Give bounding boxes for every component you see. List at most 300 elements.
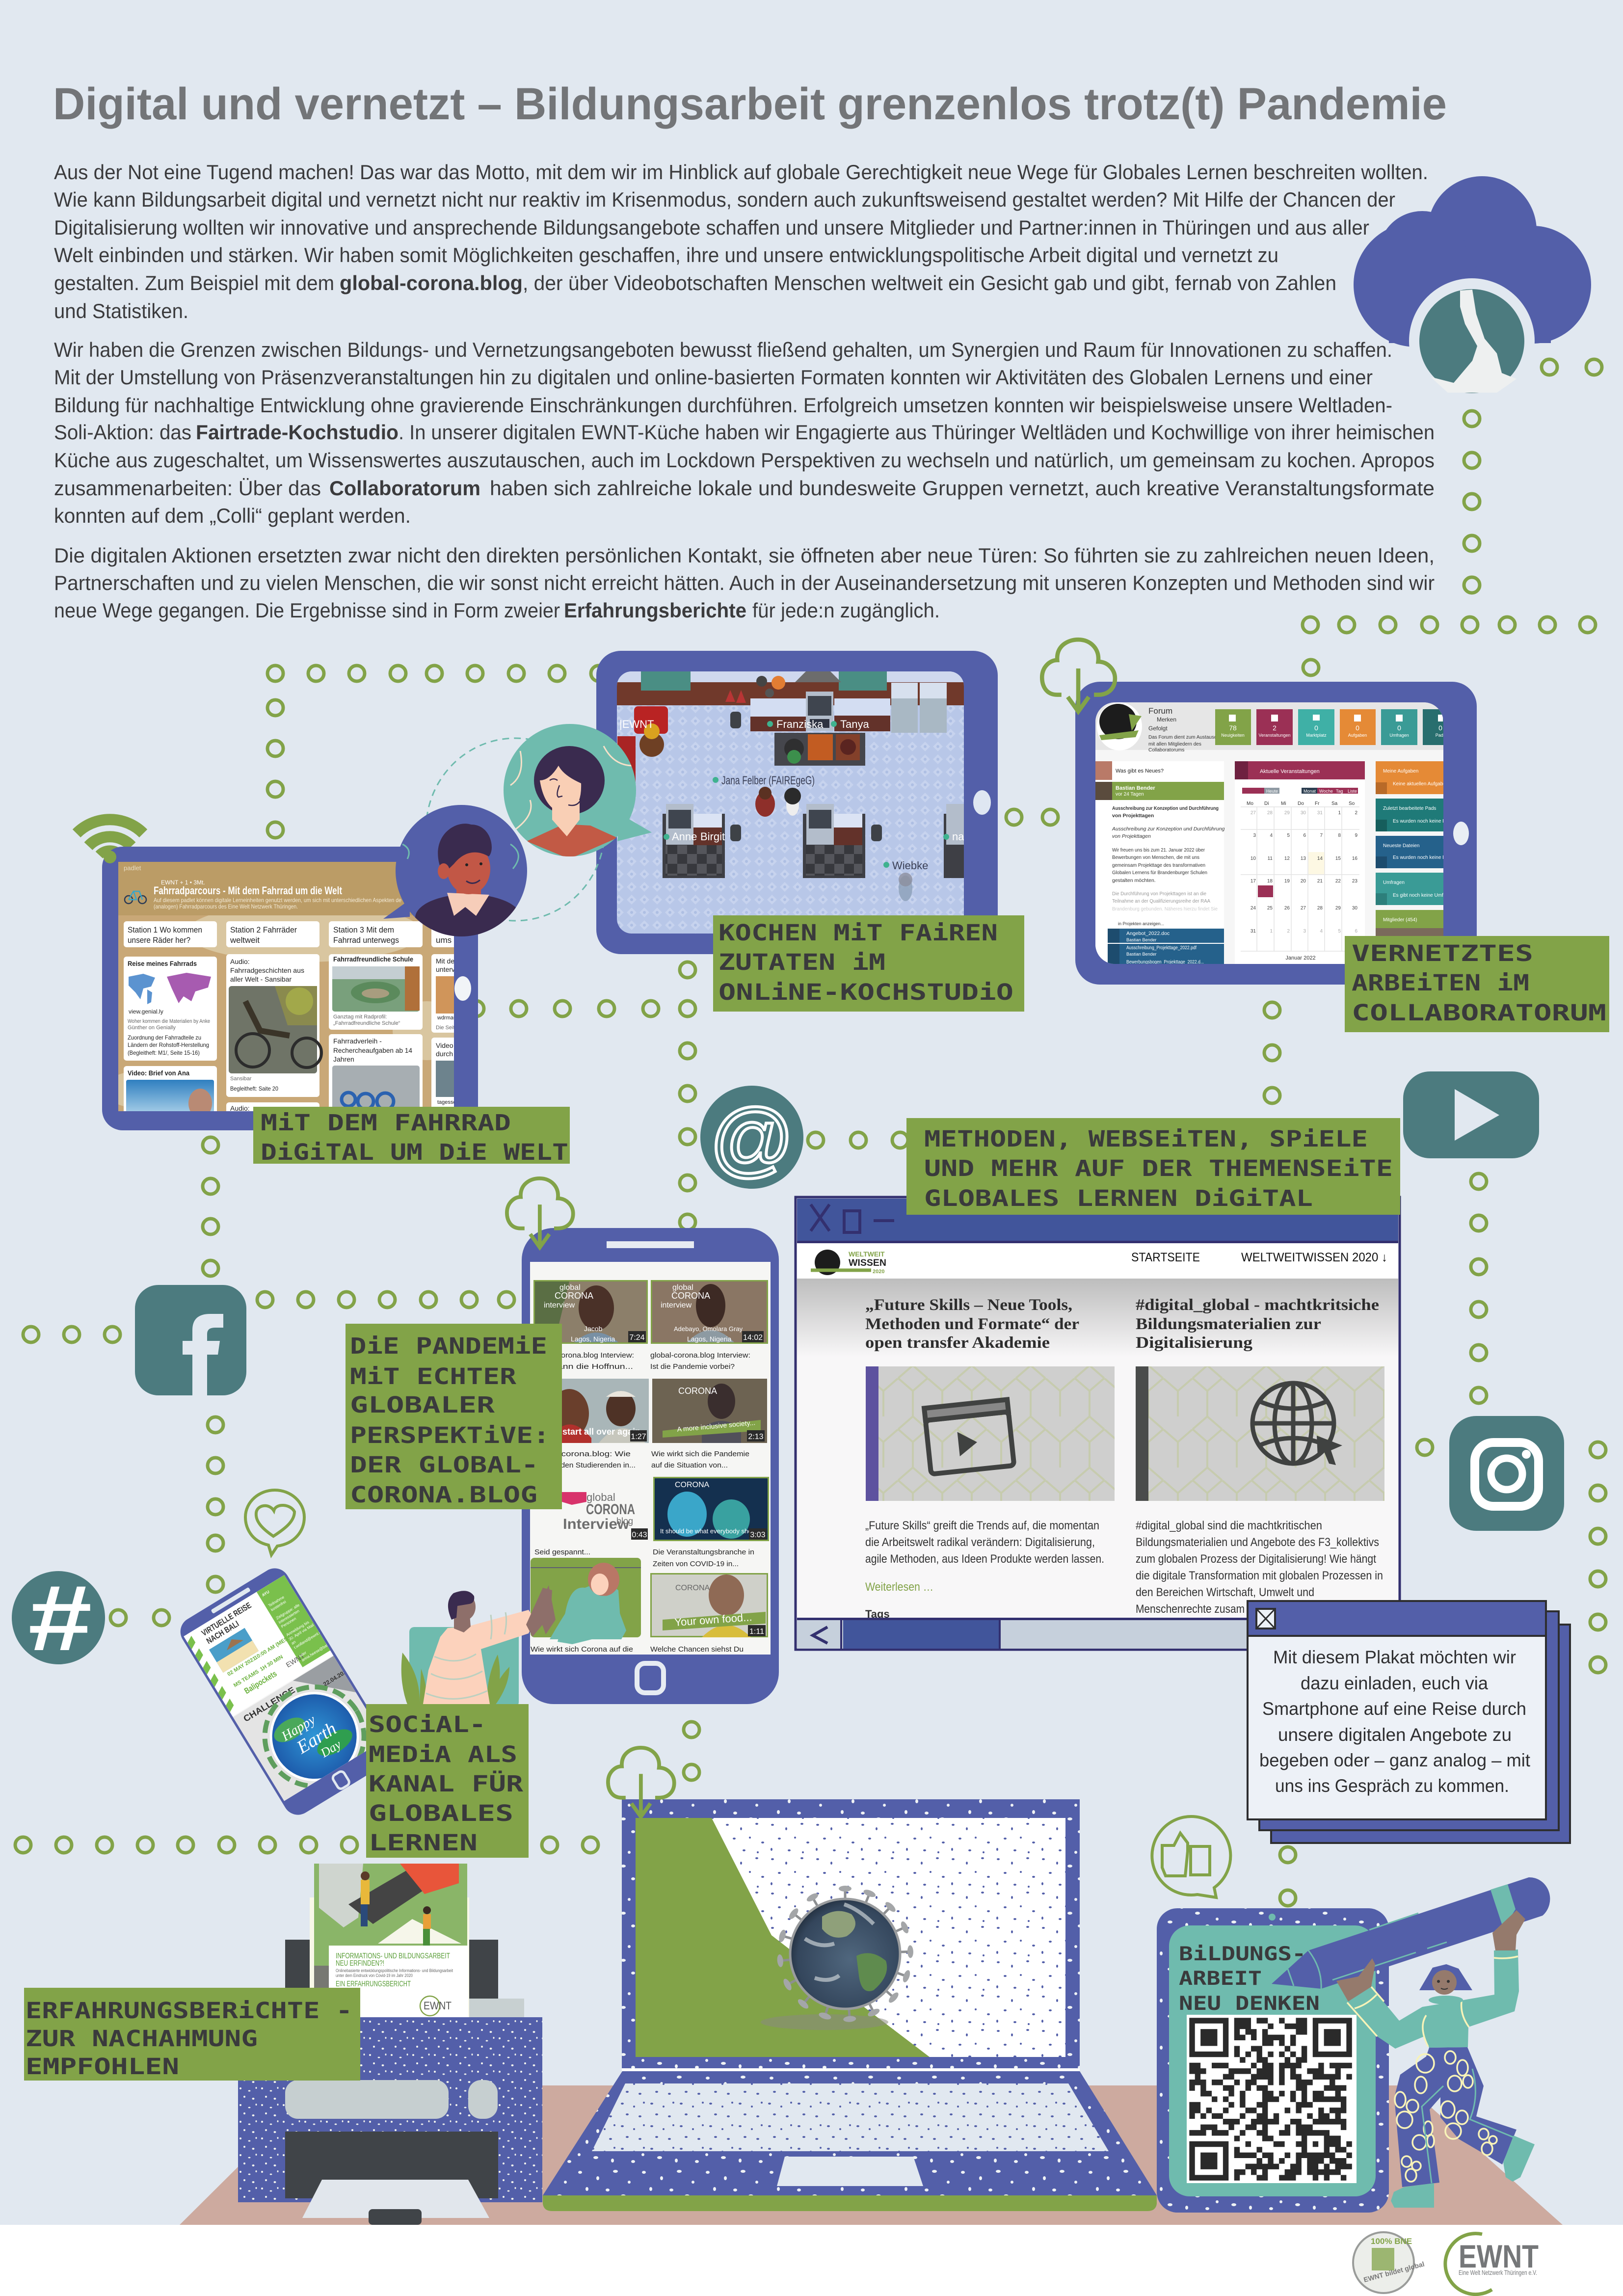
- label: Pandemie: CORONA.BLOG: [350, 1482, 537, 1508]
- intro text: paragraph 1: , der über Videobotschaften Menschen weltweit ein Gesicht gab und gibt, fernab von Zahlen: [523, 271, 1336, 294]
- dashed link between avatars: [426, 738, 605, 921]
- collaboratorum screen: 0: [1438, 724, 1442, 732]
- calendar: 1: [1270, 929, 1273, 934]
- video thumbnail row 3: CORONA: [586, 1501, 635, 1518]
- social phone screen: t.wolland@ewnt.org: [293, 1628, 325, 1650]
- right side panels: [1376, 761, 1454, 938]
- collaboratorum screen: von Projekttagen: [1112, 813, 1154, 819]
- social phone screen: an: [291, 1640, 296, 1646]
- collaboratorum screen: 0: [1397, 724, 1401, 732]
- icon: cloud with globe: [1354, 176, 1591, 404]
- label: Bildungsarbeit neu denken: BiLDUNGS-: [1179, 1943, 1306, 1965]
- intro text: paragraph 2: Fairtrade-Kochstudio: [196, 421, 399, 444]
- kitchen home button: [973, 790, 991, 815]
- collaboratorum screen: Aufgaben: [1348, 733, 1367, 738]
- window title bar: [797, 1199, 1398, 1243]
- social phone screen: 22.04.2021: [322, 1666, 351, 1688]
- calendar: 25: [1267, 906, 1273, 911]
- label: Fahrrad: [253, 1107, 570, 1165]
- right side panels: Meine Aufgaben: [1383, 769, 1418, 774]
- intro text: paragraph 1: Wie kann Bildungsarbeit digital und vernetzt nicht nur reaktiv im Krisenmodus, sondern auch zukunftsweisend gestaltet werden? Mit Hilfe der Chancen der: [54, 188, 1395, 211]
- video thumbnail row 1: interview: [544, 1301, 575, 1309]
- calendar: 29: [1335, 906, 1341, 911]
- right side panels: Zuletzt bearbeitete Pads: [1383, 806, 1436, 811]
- label: Collaboratorum: VERNETZTES: [1352, 940, 1533, 966]
- laptop screen: [622, 1799, 1080, 2069]
- popup front window: begeben oder – ganz analog – mit: [1259, 1750, 1531, 1770]
- kitchen screen: |EWNT: [619, 718, 654, 730]
- video thumbnail row 3: Interview: [563, 1516, 630, 1532]
- video durations: [628, 1331, 767, 1636]
- calendar: Heute: [1266, 789, 1278, 794]
- calendar: 4: [1320, 929, 1323, 934]
- label: Collaboratorum: COLLABORATORUM: [1352, 1000, 1606, 1026]
- label: Kochstudio: KOCHEN MiT FAiREN: [718, 920, 998, 946]
- calendar: Sa: [1331, 801, 1338, 806]
- padlet screen: Ganztag mit Radprofil:: [333, 1014, 387, 1020]
- article 2: den Bereichen Wirtschaft, Umwelt und: [1136, 1586, 1314, 1599]
- video captions: Die Veranstaltungsbranche in: [653, 1548, 754, 1556]
- shoes: [1503, 2136, 1535, 2182]
- social phone screen: 02 MAY 2021: [226, 1655, 257, 1678]
- social phone screen: 30. April via Mail: [288, 1623, 315, 1641]
- label: Social Media: GLOBALES: [369, 1800, 513, 1826]
- video grid: [531, 1280, 769, 1654]
- giant pencil: [1272, 1877, 1550, 1989]
- social phone screen: Earth: [293, 1718, 340, 1758]
- intro text: paragraph 3: neue Wege gegangen. Die Ergebnisse sind in Form zweier: [54, 599, 560, 622]
- report cover: [310, 1864, 469, 2017]
- calendar: 27: [1251, 810, 1256, 816]
- article 2: zum globalen Prozess der Digitalisierung! Wie hängt: [1136, 1552, 1376, 1566]
- padlet screen: Zuordnung der Fahrradteile zu: [128, 1034, 201, 1041]
- popup front window: dazu einladen, euch via: [1301, 1673, 1488, 1693]
- article 2: #digital_global - machtkritsiche: [1136, 1296, 1379, 1314]
- report cover: INFORMATIONS- UND BILDUNGSARBEIT: [336, 1952, 450, 1960]
- calendar: Monat: [1304, 789, 1316, 794]
- title: Digital und vernetzt – Bildungsarbeit grenzenlos trotz(t) Pandemie: [53, 79, 1447, 129]
- calendar: 11: [1268, 856, 1273, 861]
- tablet: padlet Fahrrad: [102, 847, 478, 1130]
- padlet screen: view.genial.ly: [129, 1008, 163, 1015]
- label: Social Media: LERNEN: [369, 1830, 478, 1856]
- calendar: 4: [1270, 833, 1273, 838]
- article 1: open transfer Akademie: [865, 1334, 1050, 1352]
- intro text: paragraph 3: Partnerschaften und zu vielen Menschen, die wir sonst nicht erreicht hätten. Auch in der Auseinandersetzung mit unseren Konzepten und Methoden sind wir: [54, 571, 1435, 594]
- collaboratorum screen: mit allen Mitgliedern des: [1148, 742, 1201, 747]
- kitchen avatars: [755, 787, 912, 901]
- collaboratorum screen: 0: [1314, 724, 1318, 732]
- right side panels: Neueste Dateien: [1383, 843, 1419, 849]
- label: Erfahrungsberichte: ERFAHRUNGSBERiCHTE -: [26, 1998, 352, 2024]
- intro text: paragraph 2: . In unserer digitalen EWNT-Küche haben wir Engagierte aus Thüringer Weltläden und Kochwillige von ihrer heimischen: [399, 421, 1435, 444]
- calendar: 6: [1303, 833, 1306, 838]
- video grid: 3:03: [750, 1531, 766, 1539]
- video captions: Wie wirkt sich die Pandemie: [651, 1450, 749, 1458]
- social phone screen: 1H 30 MIN: [259, 1654, 284, 1673]
- Weltweit Wissen logo: WELTWEIT: [849, 1250, 885, 1258]
- label: Erfahrungsberichte: ZUR NACHAHMUNG: [26, 2026, 258, 2052]
- padlet screen: Station 2 Fahrräder: [230, 925, 297, 934]
- video thumbnail row 4: CORONA: [675, 1584, 710, 1592]
- social phone screen: 10:00 AM (MEST): [253, 1633, 293, 1661]
- browser window: Globales Lernen digital: [796, 1197, 1400, 1650]
- calendar: 28: [1317, 906, 1323, 911]
- label: Pandemie: [346, 1324, 562, 1509]
- Weltweit Wissen logo: 2020: [873, 1269, 884, 1275]
- padlet screen: Video: [436, 1041, 453, 1049]
- label: Bildungsarbeit neu denken: [1179, 1943, 1320, 2015]
- video thumbnail row 1: CORONA: [671, 1291, 710, 1301]
- intro text: paragraph 2: haben sich zahlreiche lokale und bundesweite Gruppen vernetzt, auch kreative Veranstaltungsformate: [490, 477, 1435, 500]
- icon: play button: [1403, 1071, 1539, 1158]
- video captions: Welche Chancen siehst Du: [650, 1645, 744, 1654]
- kitchen screen: na: [952, 830, 964, 843]
- calendar: So: [1349, 801, 1355, 806]
- calendar: 6: [1355, 929, 1357, 934]
- label: Social Media: SOCiAL-: [369, 1711, 486, 1737]
- line icon: download cloud 1: [1042, 640, 1115, 712]
- label: Kochstudio: ONLiNE-KOCHSTUDiO: [718, 979, 1013, 1005]
- label: Bildungsarbeit neu denken: ARBEIT: [1179, 1968, 1262, 1990]
- article 2: die digitale Transformation mit globalen Prozessen in: [1136, 1569, 1383, 1582]
- video captions: geht es den Studierenden in...: [533, 1461, 636, 1469]
- padlet screen: [103, 862, 461, 1118]
- kitchen cooking stations: [663, 804, 964, 878]
- intro text: paragraph 3: Erfahrungsberichte: [564, 599, 746, 622]
- social phone screen: Personen: [280, 1616, 297, 1629]
- padlet screen: Video: Brief von Ana: [128, 1069, 189, 1077]
- social phone screen: Anmeldung bis: [286, 1620, 310, 1637]
- collaboratorum screen: gestalten möchten.: [1112, 878, 1156, 883]
- kitchen screen: Anne: [672, 830, 697, 843]
- padlet screen: Audio:: [230, 958, 250, 965]
- intro text: paragraph 2: Wir haben die Grenzen zwischen Bildungs- und Vernetzungsangeboten bewusst fließend gehalten, um Synergien und Raum für Innovationen zu schaffen.: [54, 338, 1392, 361]
- calendar: 30: [1352, 906, 1357, 911]
- padlet screen: Fahrradverleih -: [333, 1037, 382, 1045]
- label: Collaboratorum: [1345, 936, 1609, 1032]
- collaboratorum screen: Merken: [1157, 716, 1176, 723]
- kitchen screen: [617, 671, 964, 934]
- video thumbnail row 3: It should be what everybody should: [660, 1527, 760, 1535]
- calendar: 24: [1251, 906, 1256, 911]
- padlet screen: Mit de: [436, 957, 454, 965]
- label: Pandemie: GLOBALER: [350, 1392, 495, 1418]
- report cover: EIN ERFAHRUNGSBERICHT: [336, 1980, 411, 1988]
- calendar: 22: [1335, 879, 1341, 884]
- padlet screen: weltweit: [230, 935, 260, 945]
- padlet screen: durch: [436, 1050, 453, 1058]
- label: Kochstudio: [713, 915, 1024, 1012]
- tilted phone: social media: [175, 1561, 401, 1820]
- padlet screen: Station 3 Mit dem: [333, 925, 394, 934]
- calendar: Mo: [1247, 801, 1253, 806]
- footer logo: EWNT bildet global seal: 100% BNE: [1371, 2237, 1412, 2246]
- padlet screen: (Begleitheft: M1/, Seite 15-16): [128, 1049, 200, 1056]
- QR phone: [1157, 1908, 1389, 2213]
- video thumbnail row 4: Your own food...: [674, 1611, 752, 1629]
- padlet screen: Begleitheft: Saite 20: [230, 1085, 278, 1092]
- label: Pandemie: PERSPEKTiVE:: [350, 1422, 550, 1448]
- collaboratorum screen: Bastian Bender: [1126, 952, 1157, 957]
- intro text: paragraph 3: [54, 544, 1435, 622]
- icon: globe with cursor: [1252, 1383, 1342, 1465]
- kitchen screen: Franziska: [776, 718, 824, 730]
- calendar: 16: [1352, 856, 1357, 861]
- article 1: agile Methoden, aus Ideen Produkte werden lassen.: [865, 1552, 1104, 1566]
- social phone screen: interessierten: [278, 1609, 300, 1625]
- icon: bicycle: [125, 891, 146, 904]
- collaboratorum screen: [1095, 702, 1454, 965]
- video thumbnail row 1: Lagos, Nigeria: [687, 1335, 731, 1343]
- intro text: paragraph 1: Welt einbinden und stärken. Wir haben somit Möglichkeiten geschaffen, ihre und unsere entwicklungspolitische Arbeit digital und vernetzt zu: [54, 243, 1278, 267]
- video thumbnail row 3: CORONA: [675, 1481, 710, 1489]
- collaboratorum screen: Umfragen: [1389, 733, 1409, 738]
- head: [1419, 1964, 1472, 2004]
- label: Pandemie: DER GLOBAL-: [350, 1452, 538, 1478]
- icon: heart bubble: [245, 1490, 304, 1555]
- video grid: 14:02: [743, 1334, 763, 1342]
- padlet screen: aller Welt - Sansibar: [230, 975, 292, 983]
- social phone screen: VIRTUELLE REISE: [200, 1601, 253, 1638]
- collaboratorum screen: gemeinsam Projekttage des transformativen: [1112, 862, 1205, 868]
- calendar: 7: [1320, 833, 1323, 838]
- padlet screen: Fahrradgeschichten aus: [230, 966, 304, 974]
- desk: [180, 2085, 1563, 2225]
- padlet screen: ganztagsschulen.org: [335, 1005, 385, 1011]
- video thumbnail row 1: global: [672, 1283, 693, 1292]
- footer logo: EWNT: Eine Welt Netzwerk Thüringen e.V.: [1459, 2269, 1537, 2276]
- calendar: 5: [1338, 929, 1341, 934]
- intro text: paragraph 2: Soli-Aktion: das: [54, 421, 191, 444]
- hands: [1492, 1910, 1525, 1950]
- illustration: woman high five: [537, 1563, 626, 1644]
- avatar: woman in speech bubble: [504, 724, 652, 859]
- right side panels: Es gibt noch keine Umfrage: [1393, 893, 1453, 898]
- label: Methoden: GLOBALES LERNEN DiGiTAL: [924, 1185, 1313, 1211]
- collaboratorum screen: Das Forum dient zum Austausch: [1148, 735, 1220, 740]
- social phone screen: Zielgruppe: alle: [275, 1602, 301, 1621]
- video thumbnail row 1: Jacob: [584, 1325, 603, 1333]
- video captions: Seid gespannt...: [534, 1548, 590, 1556]
- right side panels: Keine aktuellen Aufgaben: [1393, 781, 1448, 787]
- padlet screen: Fahrradparcours - Mit dem Fahrrad um die Welt: [154, 884, 343, 897]
- social phone screen: Day: [318, 1737, 344, 1761]
- article 2: Digitalisierung: [1136, 1334, 1253, 1352]
- padlet screen: tagessc: [437, 1099, 456, 1105]
- video thumbnail row 2: start all over again: [562, 1427, 640, 1437]
- article 1: Weiterlesen …: [865, 1580, 933, 1594]
- label: Kochstudio: ZUTATEN iM: [718, 949, 885, 975]
- collaboratorum screen: Gefolgt: [1148, 725, 1168, 732]
- label: Fahrrad: MiT DEM FAHRRAD: [261, 1110, 511, 1136]
- label: Collaboratorum: ARBEiTEN iM: [1352, 970, 1529, 996]
- video grid: 7:24: [629, 1334, 645, 1342]
- line icon: download cloud 3: [608, 1748, 674, 1817]
- label: Bildungsarbeit neu denken: NEU DENKEN: [1179, 1993, 1320, 2015]
- footer logo: EWNT: [1445, 2234, 1539, 2295]
- padlet screen: Fahrrad unterwegs: [333, 935, 399, 945]
- calendar: 1: [1338, 810, 1341, 816]
- QR code: [1187, 2015, 1357, 2183]
- social phone screen: [184, 1572, 395, 1810]
- video thumbnail row 2: A more inclusive society...: [677, 1418, 756, 1433]
- video grid: 1:27: [631, 1433, 646, 1441]
- intro text: paragraph 3: für jede:n zugänglich.: [752, 599, 940, 622]
- smartphone: global-corona blog: [522, 1228, 779, 1704]
- illustration: woman holding pencil: [1272, 1877, 1550, 2208]
- collaboratorum screen: Marktplatz: [1306, 733, 1327, 738]
- calendar: 9: [1355, 833, 1357, 838]
- line icon: download cloud 2: [507, 1178, 573, 1248]
- video thumbnail row 3: blog: [616, 1516, 633, 1526]
- calendar: Aktuelle Veranstaltungen: [1260, 769, 1320, 774]
- social phone screen: MS TEAMS: [233, 1669, 260, 1688]
- video thumbnail row 1: [533, 1280, 768, 1344]
- video captions: auf die Situation von...: [651, 1461, 728, 1469]
- article 2: Menschenrechte zusam: [1136, 1602, 1245, 1616]
- kitchen screen: Birgit: [700, 830, 725, 843]
- padlet screen: Woher kommen die Materialien by Anke: [128, 1018, 210, 1024]
- article 2: #digital_global sind die machtkritischen: [1136, 1519, 1322, 1532]
- intro text: paragraph 2: zusammenarbeiten: Über das: [54, 477, 321, 500]
- intro text: paragraph 3: Die digitalen Aktionen ersetzten zwar nicht den direkten persönlichen Kontakt, sie öffneten aber neue Türen: So führten sie zu zahlreichen neuen Ideen,: [54, 544, 1435, 567]
- social phone screen: AYU: [261, 1590, 270, 1598]
- social phone screen: NACH BALI: [205, 1619, 240, 1646]
- padlet screen: Sansibar: [230, 1076, 252, 1082]
- video captions: global-corona.blog Interview:: [533, 1351, 634, 1360]
- label: Methoden: UND MEHR AUF DER THEMENSEiTE: [924, 1155, 1393, 1181]
- calendar: 17: [1251, 879, 1256, 884]
- calendar: 10: [1251, 856, 1256, 861]
- kitchen screen: Tanya: [840, 718, 869, 730]
- calendar: 23: [1352, 879, 1357, 884]
- intro text: paragraph 1: gestalten. Zum Beispiel mit dem: [54, 271, 334, 294]
- label: Pandemie: MiT ECHTER: [350, 1363, 517, 1389]
- video captions: Wie wirkt sich Corona auf die: [531, 1645, 633, 1654]
- video thumbnail row 1: global: [559, 1283, 581, 1292]
- icon: hashtag: [12, 1566, 105, 1670]
- calendar: 3: [1303, 929, 1306, 934]
- label: Methoden: METHODEN, WEBSEiTEN, SPiELE: [924, 1126, 1368, 1152]
- popup window stack: [1248, 1601, 1570, 1843]
- collaboratorum home button: [1453, 822, 1469, 845]
- icon: instagram: [1449, 1416, 1564, 1531]
- Weltweit Wissen logo: WISSEN: [849, 1258, 886, 1268]
- video thumbnail row 1: Adebayo, Omolara Gray: [674, 1325, 743, 1333]
- label: Social Media: MEDiA ALS: [369, 1741, 517, 1767]
- label: Pandemie: DiE PANDEMiE: [350, 1333, 547, 1359]
- calendar: Tag: [1336, 789, 1343, 794]
- phone home button: [637, 1663, 664, 1693]
- calendar: 14: [1317, 856, 1323, 861]
- video captions: Wie kann die Hoffnun...: [533, 1362, 633, 1371]
- tablet: kitchen game: [596, 651, 998, 954]
- collaboratorum screen: Forum: [1148, 706, 1172, 716]
- social phone screen: Happy: [278, 1712, 319, 1744]
- label: Methoden: [906, 1118, 1400, 1215]
- article 1: [865, 1296, 1115, 1620]
- padlet screen: Die Seite: [436, 1025, 458, 1031]
- video grid: 0:43: [632, 1531, 647, 1539]
- laptop: [543, 1799, 1157, 2211]
- wifi dot: [104, 851, 116, 863]
- article 2: Bildungsmaterialien zur: [1136, 1315, 1321, 1333]
- calendar: 31: [1317, 810, 1323, 816]
- label: Social Media: [366, 1704, 529, 1858]
- collaboratorum screen: Ausschreibung zur Konzeption und Durchführung: [1112, 805, 1219, 811]
- label: Erfahrungsberichte: [24, 1988, 360, 2081]
- intro text: paragraph 1: und Statistiken.: [54, 299, 188, 322]
- collaboratorum screen: Was gibt es Neues?: [1116, 768, 1164, 774]
- popup front window: unsere digitalen Angebote zu: [1278, 1725, 1512, 1745]
- collaboratorum screen: Bastian Bender: [1116, 785, 1155, 791]
- article 2: Bildungsmaterialien und Angebote des F3_kollektivs: [1136, 1536, 1379, 1549]
- kitchen screen: Jana Felber (FAIREgeG): [721, 774, 815, 787]
- avatar: man in speech bubble: [383, 805, 527, 941]
- report cover: EWNT: [424, 2000, 452, 2012]
- calendar: 19: [1284, 879, 1290, 884]
- social phone screen: oder: [298, 1650, 307, 1658]
- padlet screen: Jahren: [333, 1055, 354, 1063]
- collaboratorum screen: Pads: [1436, 733, 1446, 738]
- collaboratorum screen: von Projekttagen: [1112, 833, 1151, 839]
- calendar: 30: [1301, 810, 1306, 816]
- intro text: paragraph 1: Aus der Not eine Tugend machen! Das war das Motto, mit dem wir im Hinblick auf globale Gerechtigkeit neue Wege für Globales Lernen beschreiten wollten.: [54, 160, 1428, 184]
- padlet screen: Station 1 Wo kommen: [128, 925, 202, 934]
- calendar: 13: [1301, 856, 1306, 861]
- calendar: 18: [1267, 879, 1273, 884]
- report cover: NEU ERFINDEN?!: [336, 1959, 384, 1968]
- popup front window: uns ins Gespräch zu kommen.: [1275, 1776, 1509, 1796]
- right side panels: Umfragen: [1383, 880, 1405, 885]
- illustration: man high five: [401, 1588, 552, 1707]
- padlet screen: Günther on Genially: [128, 1025, 176, 1031]
- calendar: 28: [1267, 810, 1273, 816]
- Weltweit Wissen logo: [811, 1250, 886, 1275]
- label: Erfahrungsberichte: EMPFOHLEN: [26, 2054, 179, 2080]
- padlet home button: [454, 976, 471, 1001]
- intro text: paragraph 2: konnten auf dem „Colli“ geplant werden.: [54, 504, 411, 527]
- browser window: Globales Lernen digital: WELTWEITWISSEN 2020 ↓: [1241, 1251, 1387, 1264]
- calendar: Woche: [1319, 789, 1333, 794]
- video thumbnail row 1: Lagos, Nigeria: [571, 1335, 615, 1343]
- social phone screen: EWNT: [285, 1652, 306, 1669]
- video thumbnail row 3: global: [586, 1491, 615, 1503]
- intro text: paragraph 2: Küche aus zugeschaltet, um Wissenswertes auszutauschen, auch im Lockdown Perspektiven zu wechseln und natürlich, um gemeinsam zu kochen. Apropos: [54, 449, 1435, 472]
- calendar: 29: [1284, 810, 1290, 816]
- footer logo: EWNT bildet global seal: [1353, 2232, 1425, 2293]
- intro text: paragraph 1: global-corona.blog: [340, 271, 523, 294]
- calendar: [1235, 761, 1365, 964]
- calendar: Januar 2022: [1285, 955, 1316, 961]
- label: Social Media: KANAL FÜR: [369, 1771, 524, 1797]
- collaboratorum screen: Ausschreibung_Projekttage_2022.pdf: [1126, 945, 1197, 951]
- calendar: 2: [1287, 929, 1290, 934]
- footer logo: EWNT bildet global seal: EWNT bildet global: [1363, 2260, 1425, 2284]
- padlet screen: Ländern der Rohstoff-Herstellung: [128, 1041, 209, 1048]
- padlet screen: Audio:: [230, 1104, 250, 1112]
- calendar: Mi: [1281, 801, 1286, 806]
- popup front window: Mit diesem Plakat möchten wir: [1273, 1647, 1516, 1667]
- collaboratorum screen: Neuigkeiten: [1221, 733, 1245, 738]
- plants: [401, 1653, 509, 1707]
- footer strip: [0, 2225, 1623, 2296]
- popup front window: Smartphone auf eine Reise durch: [1262, 1699, 1526, 1719]
- social phone screen: kostenfrei: [270, 1600, 287, 1612]
- padlet screen: „Fahrradfreundliche Schule“: [333, 1020, 400, 1026]
- sweater: [1347, 1949, 1519, 2049]
